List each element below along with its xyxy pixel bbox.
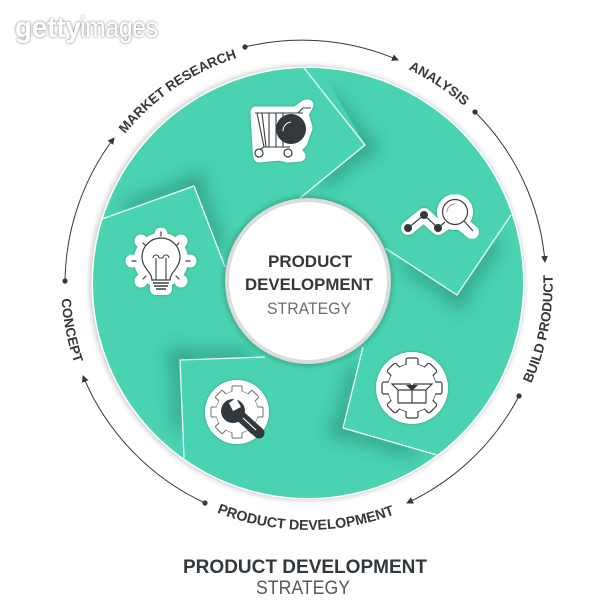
icon: gear with box: [376, 352, 448, 424]
segment shadows: [102, 68, 511, 458]
center title: STRATEGY: [267, 300, 351, 318]
label: analysis: ANALYSIS: [408, 62, 469, 105]
bottom title: [183, 556, 427, 599]
center title: PRODUCT: [268, 253, 352, 271]
bottom title: PRODUCT DEVELOPMENT: [183, 556, 427, 578]
watermark: gettyimages: images: [80, 12, 158, 44]
label: market research: MARKET RESEARCH: [118, 49, 236, 134]
watermark: gettyimages: getty: [15, 12, 81, 44]
icon: light bulb: [126, 228, 196, 295]
label: build product: BUILD PRODUCT: [523, 275, 553, 383]
arrow: build product to product development: [407, 393, 522, 503]
center title: [245, 253, 373, 318]
arrow: analysis to build product: [472, 109, 545, 262]
label: concept: CONCEPT: [62, 298, 84, 361]
arrow: product development to concept: [83, 376, 208, 506]
center title: DEVELOPMENT: [245, 276, 373, 294]
arrow: concept to market research: [62, 138, 114, 284]
bottom title: STRATEGY: [256, 577, 350, 599]
watermark: gettyimages: [15, 12, 158, 44]
label: product development: PRODUCT DEVELOPMENT: [218, 504, 392, 530]
central disc with segments: [89, 65, 525, 501]
icon: chart and magnifier: [404, 200, 473, 232]
icon: shopping cart: [255, 105, 311, 157]
center circle: [223, 196, 393, 366]
arrow: market research to analysis: [242, 40, 398, 60]
icon: gear with wrench: [205, 380, 269, 444]
